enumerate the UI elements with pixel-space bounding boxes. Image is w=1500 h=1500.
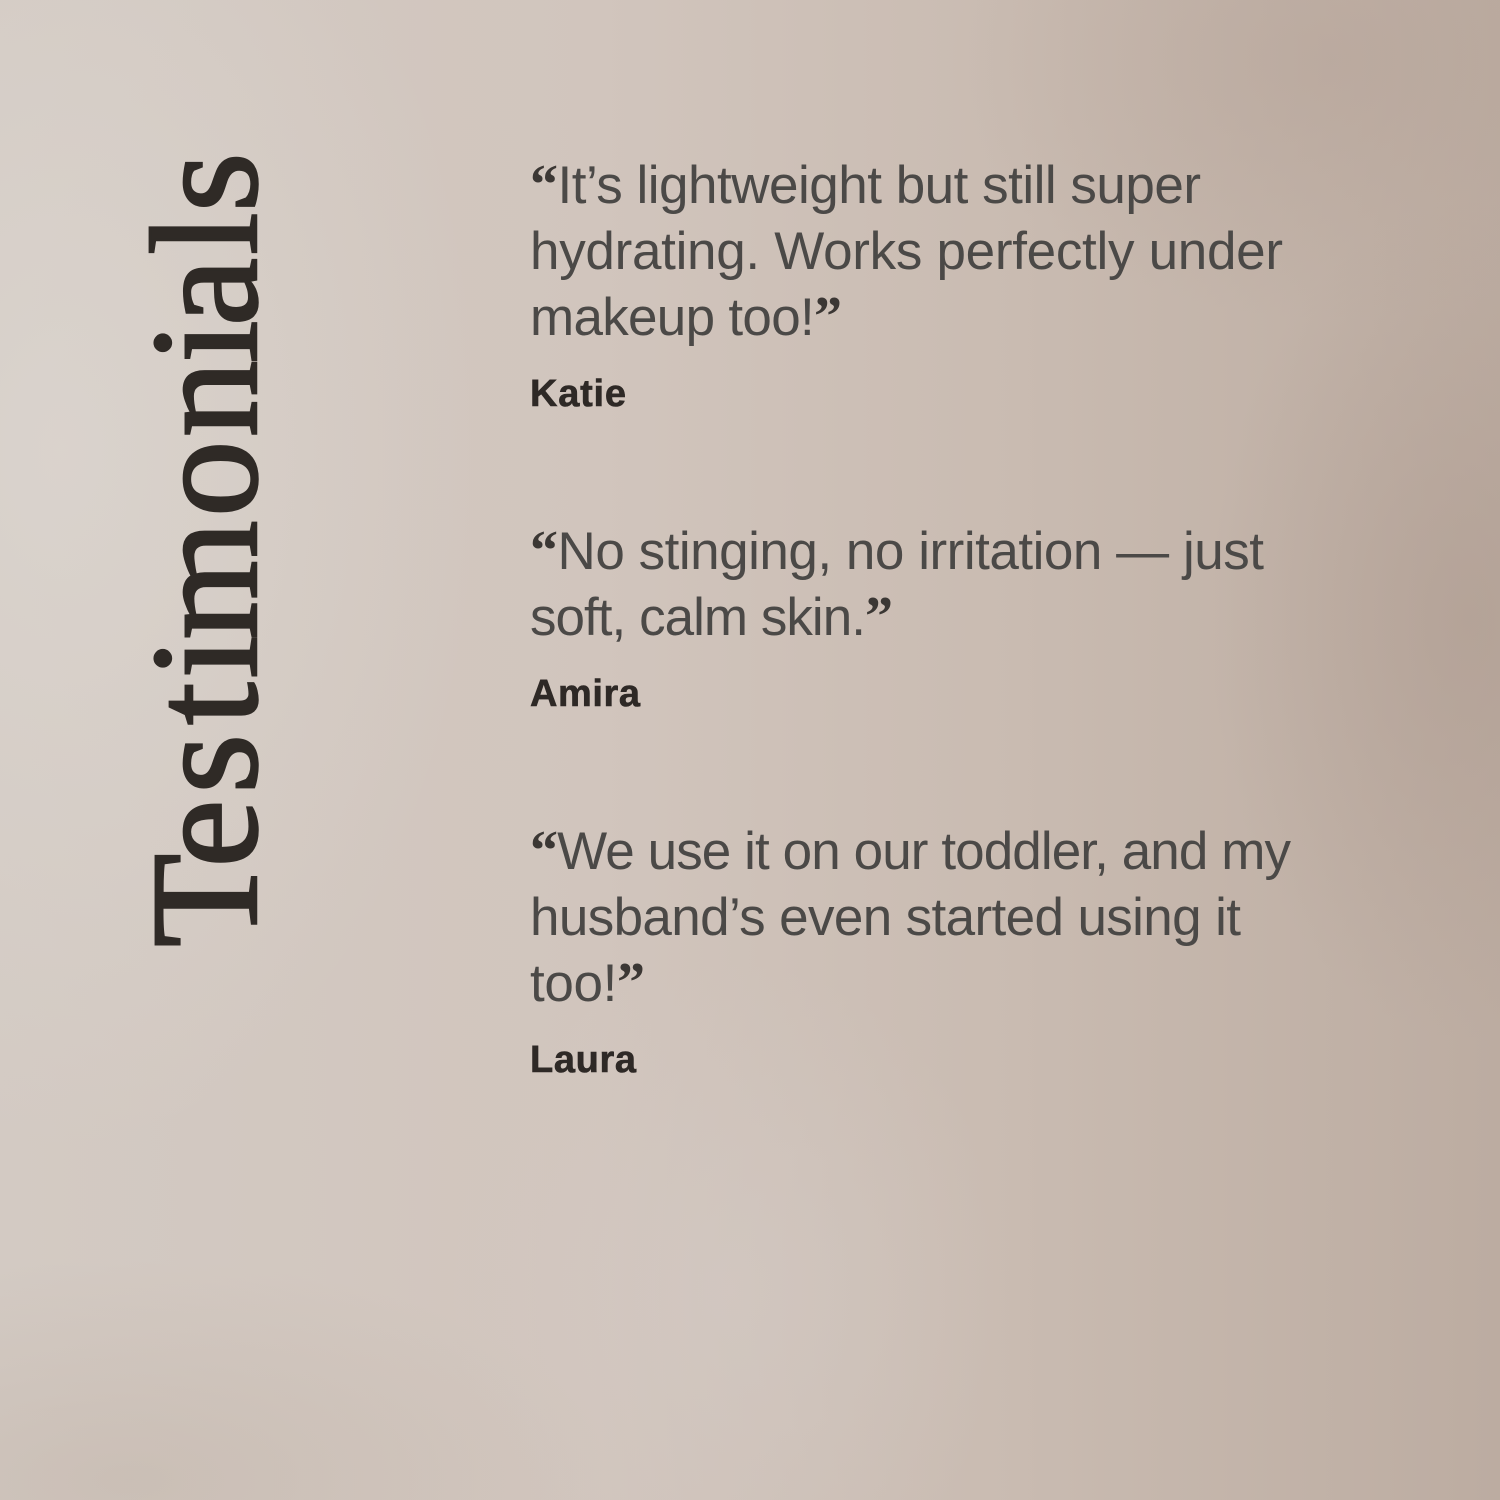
name: Laura: Laura	[530, 1039, 637, 1081]
testimonial: Amira	[530, 520, 1264, 715]
name: Amira: Amira	[530, 673, 641, 715]
quote text: Laura: “We use it on our toddler, and my	[530, 820, 1292, 882]
quote text: Amira	[530, 520, 1264, 648]
quote text: Laura: too!”	[530, 952, 645, 1014]
quote text: Laura	[530, 820, 1292, 1014]
title: Testimonials	[121, 152, 290, 947]
quote text: Amira: “No stinging, no irritation — just	[530, 520, 1264, 582]
quote text: Katie: makeup too!”	[530, 286, 842, 348]
quote text: Katie	[530, 154, 1283, 348]
testimonial: Katie	[530, 154, 1283, 415]
quote text: Amira: soft, calm skin.”	[530, 586, 893, 648]
quote text: Laura: husband’s even started using it	[530, 888, 1241, 947]
testimonial: Laura	[530, 820, 1292, 1081]
quote text: Katie: “It’s lightweight but still super	[530, 154, 1201, 216]
quote text: Katie: hydrating. Works perfectly under	[530, 222, 1283, 281]
name: Katie: Katie	[530, 373, 626, 415]
